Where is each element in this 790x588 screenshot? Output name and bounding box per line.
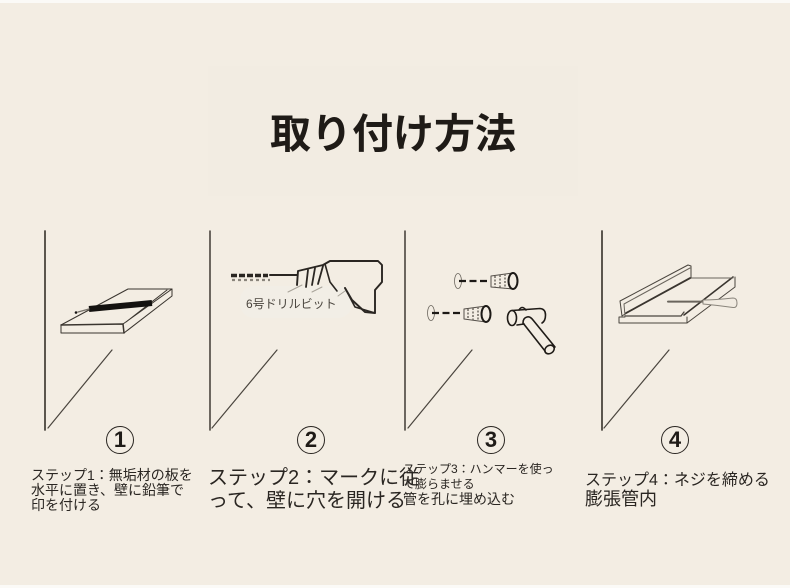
step 1 text: ステップ1：無垢材の板を xyxy=(31,467,193,483)
step 4 text xyxy=(585,471,770,509)
step 2 text: ステップ2：マークに従 xyxy=(208,467,419,489)
icon: hand with drill bit xyxy=(231,261,382,313)
icon: lower anchor and screw xyxy=(428,306,490,322)
step number 2 xyxy=(297,426,325,454)
step number 1: 1 xyxy=(114,427,126,452)
drill label background patch xyxy=(240,286,352,318)
step number 2: 2 xyxy=(305,427,317,452)
icon: upper anchor and screw xyxy=(454,273,518,289)
step 4 text: ステップ4：ネジを締める xyxy=(585,472,770,489)
bottom white edge xyxy=(0,585,790,588)
step number 3 xyxy=(477,426,505,454)
step number 3: 3 xyxy=(485,427,497,452)
wall and floor lines: step 1 xyxy=(45,231,112,430)
step 3 text: て膨らませる xyxy=(403,477,475,491)
step 3 text: ステップ3：ハンマーを使っ xyxy=(403,462,554,476)
step 2 text: って、壁に穴を開ける xyxy=(208,490,406,512)
top white edge xyxy=(0,0,790,3)
step 2 text xyxy=(208,467,419,512)
step 3 text: 管を孔に埋め込む xyxy=(403,491,515,507)
icon: shelf with bracket and screwdriver xyxy=(619,265,737,323)
step number 1 xyxy=(106,426,134,454)
step 1 text xyxy=(31,467,193,513)
step 3 text xyxy=(403,462,554,507)
step number 4: 4 xyxy=(669,427,681,452)
icon: shelf board with pencil xyxy=(61,289,172,333)
step 1 text: 水平に置き、壁に鉛筆で xyxy=(31,482,184,498)
drill bit label: 6号ドリルビット xyxy=(246,297,337,311)
step number 4 xyxy=(661,426,689,454)
step 1 text: 印を付ける xyxy=(31,497,101,513)
wall and floor lines: step 4 xyxy=(602,231,669,430)
wall and floor lines: step 2 xyxy=(210,231,277,430)
icon: hammer xyxy=(508,308,556,356)
wall and floor lines: step 3 xyxy=(405,231,472,430)
step 4 text: 膨張管内 xyxy=(585,489,657,509)
title: 取り付け方法 xyxy=(270,111,516,157)
title background panel xyxy=(208,66,578,196)
